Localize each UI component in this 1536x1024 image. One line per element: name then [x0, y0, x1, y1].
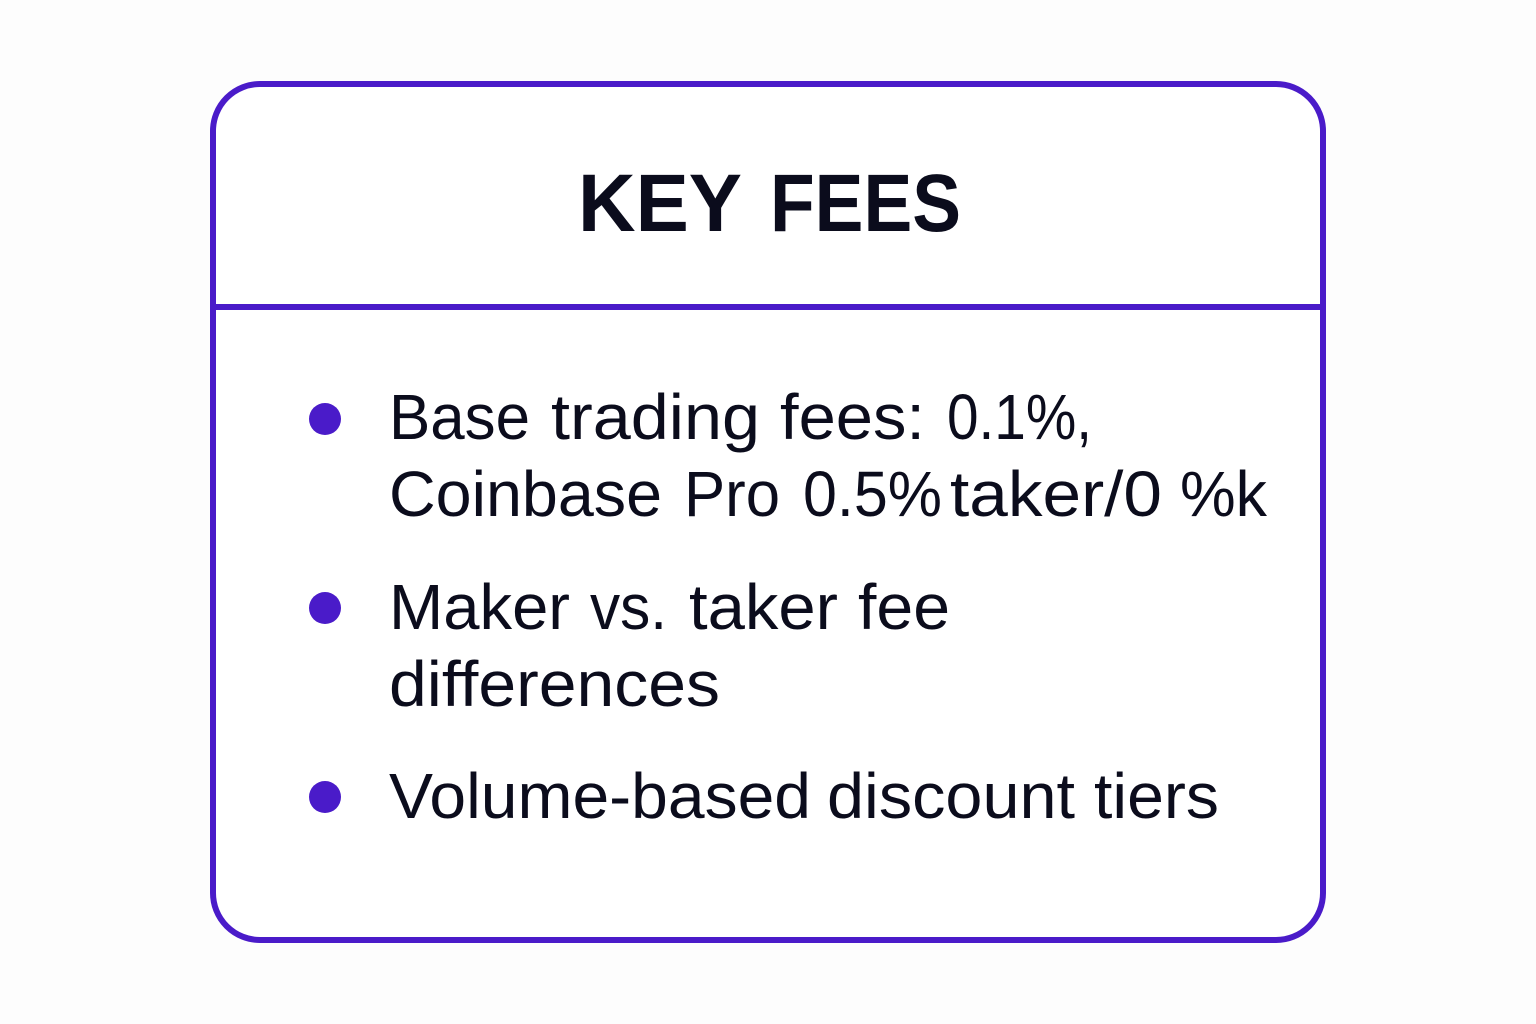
text: maker vs taker: differences — [389, 648, 720, 720]
text: base trading fees: %k — [1180, 458, 1268, 530]
text: volume discount: tiers — [1094, 760, 1219, 832]
bullet 2 — [309, 571, 950, 720]
text: base trading fees: taker/0 — [950, 458, 1162, 530]
text: base trading fees: 0.1%, — [947, 381, 1092, 453]
text: base trading fees: Base — [389, 381, 530, 453]
text: maker vs taker: fee — [858, 571, 950, 643]
text: volume discount: Volume-based — [389, 760, 811, 832]
text: base trading fees: Pro — [684, 458, 780, 530]
text: base trading fees: Coinbase — [389, 458, 662, 530]
icon: bullet dot 3 — [309, 781, 341, 813]
text: volume discount: discount — [827, 760, 1075, 832]
text: maker vs taker — [389, 571, 950, 720]
text: base trading fees: 0.5% — [803, 458, 942, 530]
title — [578, 158, 961, 249]
text: base trading fees: trading — [551, 381, 760, 453]
text: maker vs taker: vs. — [590, 571, 667, 643]
text: base trading fees — [389, 381, 1268, 530]
bullet 3 — [309, 760, 1219, 832]
text: volume discount — [389, 760, 1219, 832]
text: base trading fees: fees: — [780, 381, 925, 453]
icon: bullet dot 2 — [309, 592, 341, 624]
icon: bullet dot 1 — [309, 403, 341, 435]
text: maker vs taker: Maker — [389, 571, 570, 643]
bullet 1 — [309, 381, 1268, 530]
title: KEY — [578, 158, 742, 249]
panel: key fees card — [213, 84, 1323, 940]
text: maker vs taker: taker — [689, 571, 838, 643]
title: FEES — [770, 158, 961, 249]
